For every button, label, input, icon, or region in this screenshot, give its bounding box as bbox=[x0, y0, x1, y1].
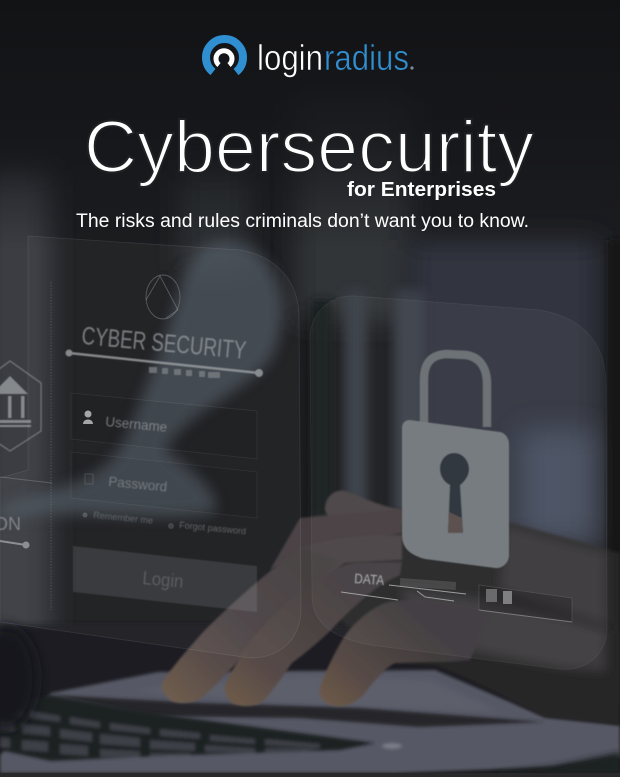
remember me and forgot password: Forgot password bbox=[179, 520, 246, 536]
left slider bbox=[0, 541, 30, 548]
keyhole bbox=[440, 453, 469, 533]
logo: loginradius bbox=[206, 37, 414, 78]
login panel glass bbox=[0, 236, 301, 658]
data lines bbox=[341, 585, 466, 601]
dark zone under panels bbox=[0, 625, 620, 705]
smoke bbox=[0, 240, 282, 520]
second finger bbox=[285, 535, 402, 600]
remember me and forgot password: Remember me bbox=[93, 510, 153, 526]
icon: logo ring bbox=[206, 39, 243, 72]
lock panel glass bbox=[310, 296, 607, 669]
laptop surface bbox=[0, 670, 620, 773]
heading: cyber security: CYBER SECURITY bbox=[80, 322, 248, 365]
keyboard bbox=[0, 695, 375, 761]
left divider line bbox=[0, 477, 52, 483]
top dark vignette bbox=[0, 0, 620, 250]
subtitle: for enterprises: for Enterprises bbox=[347, 179, 496, 201]
rear fingertip bbox=[325, 491, 402, 525]
username field bbox=[71, 393, 257, 459]
wordmark: login: login bbox=[257, 37, 323, 78]
bottom strip bbox=[0, 773, 620, 777]
lit back of hand bbox=[400, 590, 606, 672]
back of hand bbox=[300, 509, 620, 725]
wordmark dot bbox=[410, 66, 414, 70]
login button: Login bbox=[142, 568, 184, 592]
password field bbox=[71, 452, 257, 518]
wordmark: radius: radius bbox=[324, 37, 409, 78]
panel: login bbox=[0, 236, 301, 658]
username field: Username bbox=[105, 413, 168, 435]
remember me and forgot password bbox=[82, 510, 246, 536]
middle finger bbox=[225, 562, 402, 706]
password field: Password bbox=[108, 473, 168, 495]
left side hexagon bank icon bbox=[0, 361, 41, 451]
login button bbox=[73, 546, 257, 612]
progress squares bbox=[149, 367, 220, 378]
slider line bbox=[66, 350, 263, 377]
hand bbox=[162, 491, 620, 725]
left hand shadow bbox=[0, 626, 37, 730]
upper finger bbox=[270, 509, 402, 570]
finger shadow on laptop bbox=[52, 695, 545, 727]
ring finger bbox=[162, 548, 340, 703]
data bar bbox=[400, 578, 456, 590]
tagline: The risks and rules criminals don’t want you to know. bbox=[76, 211, 529, 232]
icon: globe bbox=[146, 275, 180, 319]
data control box bbox=[479, 585, 572, 622]
dotted divider bbox=[50, 282, 52, 610]
icon: padlock bbox=[402, 354, 509, 568]
title: Cybersecurity bbox=[84, 107, 535, 188]
index finger bbox=[320, 600, 490, 706]
panel: lock bbox=[310, 296, 607, 669]
label: data: DATA bbox=[354, 570, 385, 588]
key highlight bbox=[382, 743, 402, 749]
